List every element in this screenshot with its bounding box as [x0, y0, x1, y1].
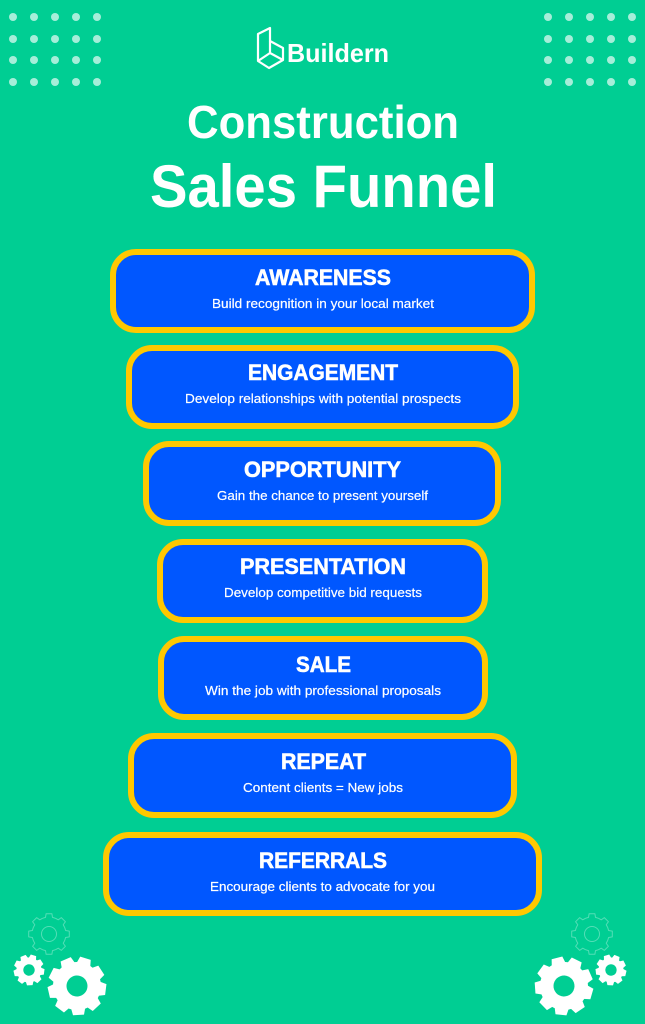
panel: opportunity — [146, 444, 498, 523]
title — [150, 96, 497, 220]
panel: sale — [161, 639, 485, 717]
description: awareness: Build recognition in your local market — [212, 296, 434, 311]
heading: sale: SALE — [296, 652, 351, 677]
description: sale: Win the job with professional proposals — [205, 683, 442, 698]
icon: large white gear right — [524, 947, 603, 1024]
description: referrals: Encourage clients to advocate for you — [210, 879, 435, 894]
heading: referrals: REFERRALS — [259, 848, 387, 873]
icon: small white gear right — [590, 950, 631, 991]
description: opportunity: Gain the chance to present yourself — [217, 488, 428, 503]
decorative dot grid: top right — [544, 13, 636, 86]
panel: repeat — [131, 736, 514, 815]
logo: Buildern — [258, 28, 389, 68]
icon: outline gear left — [29, 914, 69, 954]
heading: engagement: ENGAGEMENT — [248, 360, 399, 385]
title line 1: Construction — [187, 96, 459, 148]
logo wordmark: Buildern — [287, 38, 389, 68]
icon: building cube — [258, 28, 283, 68]
description: repeat: Content clients = New jobs — [243, 780, 404, 795]
description: engagement: Develop relationships with potential prospects — [185, 391, 462, 406]
panel: presentation — [160, 542, 485, 620]
heading: opportunity: OPPORTUNITY — [244, 457, 401, 482]
description: presentation: Develop competitive bid requests — [224, 585, 423, 600]
icon: small white gear left — [9, 951, 49, 990]
title line 2: Sales Funnel — [150, 153, 497, 220]
panel: referrals — [106, 835, 539, 913]
heading: repeat: REPEAT — [281, 749, 367, 774]
icon: large white gear left — [40, 950, 114, 1023]
heading: presentation: PRESENTATION — [240, 554, 406, 579]
icon: outline gear right — [572, 914, 612, 954]
panel: awareness — [113, 252, 532, 330]
panel: engagement — [129, 348, 516, 426]
decorative dot grid: top left — [9, 13, 101, 86]
heading: awareness: AWARENESS — [255, 265, 391, 290]
